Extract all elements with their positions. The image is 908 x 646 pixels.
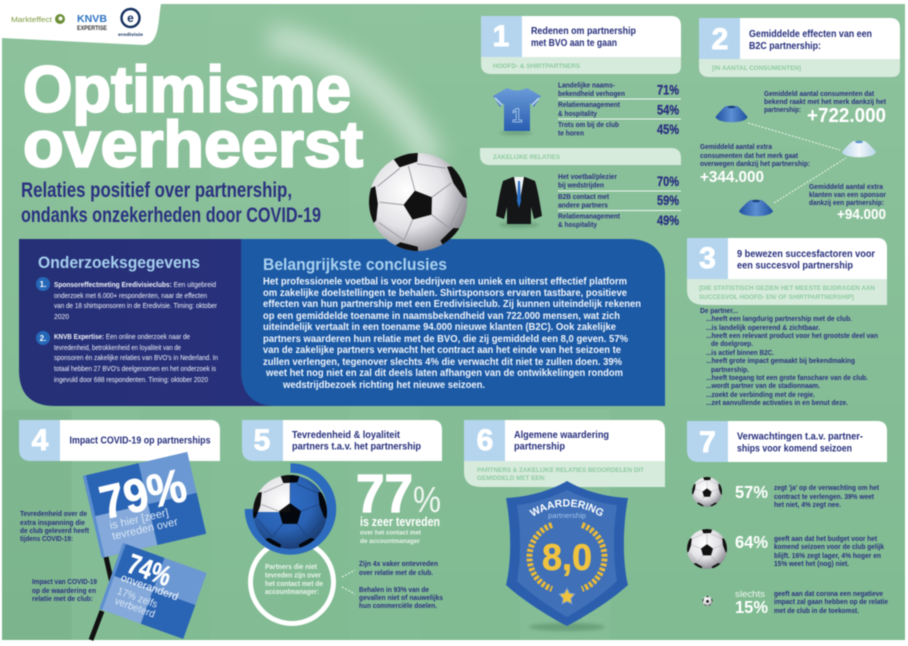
header: section 2: 2 bbox=[712, 23, 728, 56]
text: sponsoreffectmeting: Sponsoreffectmeting Eredivisieclubs: Een uitgebreid bbox=[54, 280, 216, 289]
logo: KNVB Expertise: KNVB bbox=[77, 14, 107, 25]
header: section 3: [DIE STATISTISCH GEZIEN HET MEESTE BIJDRAGEN AAN bbox=[699, 286, 875, 292]
flag: 79% bbox=[83, 452, 206, 558]
stat: 722.000 bbox=[764, 91, 887, 127]
text: tevredenheid label: Tevredenheid over de bbox=[20, 511, 87, 518]
flag: 74% bbox=[99, 543, 207, 639]
list: zakelijke relaties: Het voetbal/plezier bbox=[558, 174, 617, 181]
band: zakelijke relaties: ZAKELIJKE RELATIES bbox=[493, 155, 560, 161]
list: succesfactoren: ...heeft toegang tot een grote fanschare van de club. bbox=[706, 375, 868, 382]
list: succesfactoren: De partner... bbox=[700, 308, 738, 315]
stat: 77%: de accountmanager bbox=[360, 538, 420, 545]
stat: 94.000: Gemiddeld aantal extra bbox=[809, 184, 883, 191]
badge: waardering 8,0: partnership bbox=[548, 513, 586, 520]
header: section 1: Redenen om partnership bbox=[531, 25, 636, 37]
icon: number 1 bbox=[36, 277, 50, 291]
icon: star bbox=[559, 588, 575, 604]
stat: 344.000: overwegen dankzij het partnership: bbox=[700, 161, 810, 168]
stat: 94.000: +94.000 bbox=[837, 206, 886, 223]
header: section 5: Tevredenheid & loyaliteit bbox=[292, 429, 400, 441]
header: section 4 bbox=[19, 420, 220, 461]
text: impact label: relatie met de club: bbox=[32, 596, 93, 603]
stat: 77%: over het contact met bbox=[360, 530, 422, 536]
wreath left bbox=[529, 525, 552, 589]
flag: 74%: 74% bbox=[124, 548, 175, 592]
icon: ball 64% bbox=[685, 528, 729, 571]
stat: 94.000: klanten van een sponsor bbox=[809, 192, 886, 199]
badge: waardering 8,0: 8,0 bbox=[542, 537, 592, 578]
flag: 74%: verbeterd bbox=[113, 595, 157, 621]
icon: suit bbox=[496, 177, 542, 228]
stat: 77% bbox=[356, 464, 441, 545]
stat: 722.000: +722.000 bbox=[807, 105, 886, 127]
header: section 6: PARTNERS & ZAKELIJKE RELATIES BEOORDELEN DIT bbox=[477, 468, 644, 474]
list: zakelijke relaties: B2B contact met bbox=[558, 194, 610, 201]
header: section 1: HOOFD- & SHIRTPARTNERS bbox=[493, 64, 580, 70]
header: section 6: Algemene waardering bbox=[514, 429, 609, 441]
heading: belangrijkste conclusies: Belangrijkste conclusies bbox=[263, 255, 447, 274]
text: conclusies: om zakelijke doelstellingen te behalen. Shirtsponsors ervaren tastbare, positieve bbox=[263, 288, 627, 299]
icon: cone 2 bbox=[842, 141, 876, 157]
header: section 2: [IN AANTAL CONSUMENTEN] bbox=[712, 66, 801, 72]
list: succesfactoren: ...is actief binnen B2C. bbox=[706, 350, 774, 357]
text: gevolgen: hun commerciële doelen. bbox=[359, 603, 437, 610]
wreath right bbox=[582, 525, 605, 589]
logo: Eredivisie bbox=[118, 9, 144, 37]
list: zakelijke relaties: 70% bbox=[657, 174, 679, 189]
ring: niet tevreden bbox=[250, 540, 334, 624]
logo: Markteffect bbox=[11, 14, 65, 24]
list: zakelijke relaties: & hospitality bbox=[558, 222, 597, 229]
text: knvb expertise: tevredenheid, betrokkenheid en loyaliteit van de bbox=[54, 343, 181, 352]
header: section 2 bbox=[699, 18, 900, 77]
stat: 64%: geeft aan dat het budget voor het bbox=[774, 536, 878, 543]
icon: number 2 bbox=[36, 331, 50, 345]
text: conclusies: zullen verlengen, tegenover slechts 4% die verwacht dit niet te zullen doen. 39% bbox=[263, 357, 622, 368]
text: tevredenheid label: extra inspanning die bbox=[20, 520, 85, 527]
header: section 5: partners t.a.v. het partnership bbox=[292, 440, 421, 452]
stat: 64%: blijft. 16% zegt lager, 4% hoger en bbox=[774, 553, 881, 560]
header: section 6: 6 bbox=[477, 424, 493, 457]
text: conclusies bbox=[263, 276, 641, 391]
subtitle: Relaties positief over partnership, bbox=[21, 179, 292, 202]
chart: 77% ring and ball bbox=[250, 468, 331, 552]
list: succesfactoren: partnership. bbox=[711, 367, 749, 374]
header: section 4: 4 bbox=[32, 424, 49, 457]
icon: cone 3 bbox=[739, 200, 773, 216]
logo: Eredivisie: eredivisie bbox=[118, 32, 144, 37]
stat: 57%: zegt 'ja' op de verwachting om het bbox=[774, 485, 880, 492]
panel: onderzoeksgegevens bbox=[19, 239, 300, 406]
header: section 3: SUCCESVOL HOOFD- EN/ OF SHIRTPARTNERSHIP] bbox=[699, 295, 854, 301]
panel: section 7 bbox=[685, 421, 888, 617]
header: section 4: Impact COVID-19 op partnerships bbox=[70, 434, 211, 446]
ring: niet tevreden: het contact met de bbox=[265, 581, 323, 588]
flag pole 2 bbox=[91, 611, 102, 640]
text: conclusies: partners waarderen hun relatie met de BVO, die zij gemiddeld een 8,0 geven. 57% bbox=[263, 334, 628, 345]
text: impact label: op de waardering en bbox=[32, 588, 96, 595]
stat: 15%: 15% bbox=[735, 597, 768, 617]
connector lines bbox=[342, 570, 355, 594]
stat: 77%: % bbox=[413, 479, 441, 520]
list: succesfactoren: ...zoekt de verbinding met de regie. bbox=[706, 392, 815, 399]
flag: 74%: onveranderd bbox=[119, 572, 180, 603]
text: conclusies: op een gemiddelde toename in naamsbekendheid van 722.000 mensen, wat zich bbox=[263, 311, 620, 322]
header: section 5: 5 bbox=[254, 424, 270, 457]
list: succesfactoren bbox=[700, 308, 878, 407]
header: section 3 bbox=[687, 238, 887, 305]
badge: waardering 8,0: WAARDERING bbox=[528, 498, 604, 516]
list: succesfactoren: de doelgroep. bbox=[711, 341, 753, 348]
stat: 15%: slechts bbox=[735, 589, 766, 599]
stat: 57%: 57% bbox=[735, 482, 768, 502]
flag pole 1 bbox=[106, 557, 114, 592]
logo: Eredivisie: e bbox=[127, 11, 134, 25]
text: sponsoreffectmeting bbox=[54, 280, 217, 321]
icon: number 2: 2. bbox=[40, 334, 46, 343]
icon: large football bbox=[354, 139, 483, 267]
panel: section 1 bbox=[480, 16, 681, 229]
header: section 1: met BVO aan te gaan bbox=[531, 37, 617, 49]
list: zakelijke relaties: 49% bbox=[657, 213, 679, 228]
panel: section 6 bbox=[464, 419, 666, 632]
header: section 3: 3 bbox=[699, 242, 716, 275]
icon: ball 15% bbox=[702, 596, 713, 606]
stat: 15% bbox=[735, 589, 888, 617]
stat: 15%: met de club in de toekomst. bbox=[774, 608, 859, 615]
list: shirtpartners: & hospitality bbox=[558, 111, 597, 118]
text: conclusies: effecten van hun partnership met een Eredivisieclub. Zij kunnen uiteindelijk rekenen bbox=[263, 299, 641, 310]
list: zakelijke relaties: Relatiemanagement bbox=[558, 214, 621, 220]
heading: onderzoeksgegevens: Onderzoeksgegevens bbox=[38, 253, 200, 272]
stat: 57% bbox=[735, 482, 880, 509]
stat: 64%: komend seizoen voor de club gelijk bbox=[774, 544, 884, 551]
header: section 1 bbox=[481, 16, 681, 74]
flag: 79%: tevreden over bbox=[111, 516, 179, 543]
stat: 722.000: Gemiddeld aantal consumenten dat bbox=[764, 91, 875, 98]
icon: ball 57% bbox=[691, 476, 723, 508]
header: section 7: ships voor komend seizoen bbox=[737, 442, 852, 454]
logo corner bbox=[0, 0, 161, 45]
text: knvb expertise: KNVB Expertise: Een online onderzoek naar de bbox=[54, 332, 190, 341]
stat: 94.000 bbox=[809, 184, 886, 223]
badge: waardering 8,0 bbox=[506, 480, 628, 632]
panel: section 5 bbox=[242, 420, 443, 624]
list: shirtpartners: te horen bbox=[558, 130, 584, 138]
list: succesfactoren: ...heeft grote impact gemaakt bij bekendmaking bbox=[706, 358, 855, 365]
list: shirtpartners: Landelijke naams- bbox=[558, 82, 616, 90]
text: tevredenheid label bbox=[20, 511, 90, 543]
flag: 79%: is hier [zeer] bbox=[109, 507, 170, 532]
stat: 94.000: dankzij een partnership: bbox=[809, 200, 884, 207]
stat: 57%: contract te verlengen. 39% weet bbox=[774, 494, 875, 501]
stat: 64% bbox=[735, 532, 884, 568]
stat: 344.000 bbox=[700, 144, 810, 186]
icon: cone 1 bbox=[716, 106, 748, 122]
connector lines bbox=[748, 123, 846, 203]
text: sponsoreffectmeting: 2020 bbox=[54, 312, 69, 321]
logo: KNVB Expertise bbox=[77, 14, 107, 32]
text: knvb expertise: totaal hebben 27 BVO's deelgenomen en het onderzoek is bbox=[54, 364, 216, 373]
stat: 64%: 15% weet het (nog) niet. bbox=[774, 561, 849, 568]
text: conclusies: van de zakelijke partners verwacht het contract aan het einde van het seizoen te bbox=[263, 345, 621, 356]
ring: niet tevreden: tevreden zijn over bbox=[265, 572, 321, 580]
header: section 2: Gemiddelde effecten van een bbox=[749, 28, 872, 40]
panel: section 2 bbox=[699, 18, 900, 223]
header: section 5 bbox=[242, 420, 442, 461]
band: zakelijke relaties bbox=[480, 148, 681, 165]
icon: shirt bbox=[493, 88, 541, 135]
list: shirtpartners: Trots om bij de club bbox=[558, 122, 619, 129]
subtitle: ondanks onzekerheden door COVID-19 bbox=[21, 204, 321, 227]
flag: 79%: 79% bbox=[95, 458, 191, 529]
text: conclusies: weet het nog niet en zal dit deels laten afhangen van de ontwikkelingen rondom bbox=[265, 368, 623, 379]
list: succesfactoren: ...is landelijk opererend & zichtbaar. bbox=[706, 325, 820, 332]
list: shirtpartners bbox=[558, 82, 681, 138]
text: gevolgen: Behalen in 93% van de bbox=[359, 587, 429, 594]
flag: 74%: 17% zelfs bbox=[115, 585, 159, 611]
stat: 344.000: Gemiddeld aantal extra bbox=[700, 144, 772, 151]
header: section 6 bbox=[464, 420, 665, 487]
text: sponsoreffectmeting: onderzoek met 6.000+ respondenten, naar de effecten bbox=[54, 291, 207, 300]
stat: 344.000: +344.000 bbox=[700, 169, 764, 186]
list: succesfactoren: ...wordt partner van de stadionnaam. bbox=[706, 383, 820, 390]
text: conclusies: wedstrijdbezoek richting het nieuwe seizoen. bbox=[282, 380, 485, 391]
stat: 57%: het niet, 4% zegt nee. bbox=[774, 502, 841, 509]
subtitle bbox=[21, 179, 321, 227]
stat: 77%: 77 bbox=[356, 464, 413, 524]
list: succesfactoren: ...zet aanvullende activaties in en benut deze. bbox=[706, 400, 848, 407]
logo: Markteffect: Markteffect bbox=[11, 17, 52, 24]
list: zakelijke relaties: 59% bbox=[657, 193, 679, 208]
text: knvb expertise: ingevuld door 688 respondenten. Timing: oktober 2020 bbox=[54, 375, 208, 384]
list: zakelijke relaties: andere partners bbox=[558, 202, 608, 210]
header: section 7 bbox=[687, 421, 887, 462]
stat: 15%: impact zal gaan hebben op de relatie bbox=[774, 599, 888, 606]
text: impact label: Impact van COVID-19 bbox=[32, 579, 97, 586]
text: gevolgen: gevallen niet of nauwelijks bbox=[359, 595, 443, 602]
panel: section 3 bbox=[687, 238, 887, 407]
stat: 64%: 64% bbox=[735, 532, 768, 552]
text: knvb expertise: sponsoren én zakelijke relaties van BVO's in Nederland. In bbox=[54, 353, 218, 362]
text: knvb expertise bbox=[54, 332, 218, 384]
ring: niet tevreden: accountmanager: bbox=[265, 589, 319, 596]
ring: niet tevreden: Partners die niet bbox=[265, 564, 318, 571]
text: tevredenheid label: tijdens COVID-19: bbox=[20, 536, 73, 543]
text: conclusies: uiteindelijk vertaalt in een toename 94.000 nieuwe klanten (B2C). Ook zakelijke bbox=[263, 322, 616, 333]
list: succesfactoren: ...heeft een langdurig partnership met de club. bbox=[706, 316, 852, 323]
stat: 77%: is zeer tevreden bbox=[360, 514, 440, 529]
text: sponsoreffectmeting: van de 18 shirtsponsoren in de Eredivisie. Timing: oktober bbox=[54, 301, 217, 310]
panel: belangrijkste conclusies bbox=[241, 239, 665, 406]
logo: KNVB Expertise: EXPERTISE bbox=[77, 26, 107, 32]
title: overheerst bbox=[23, 108, 363, 180]
text: tevredenheid label: de club geleverd heeft bbox=[20, 528, 90, 535]
header: section 1: 1 bbox=[493, 20, 509, 53]
header: section 3: 9 bewezen succesfactoren voor bbox=[737, 248, 875, 260]
list: shirtpartners: bekendheid verhogen bbox=[558, 91, 625, 98]
title bbox=[23, 52, 363, 180]
text: conclusies: Het professionele voetbal is voor bedrijven een uniek en uiterst effectief platform bbox=[263, 276, 627, 288]
text: gevolgen: Zijn 4x vaker ontevreden bbox=[359, 561, 438, 568]
title: Optimisme bbox=[23, 52, 351, 126]
header: section 2: B2C partnership: bbox=[749, 40, 821, 52]
header: section 7: Verwachtingen t.a.v. partner- bbox=[737, 430, 863, 442]
list: shirtpartners: 71% bbox=[657, 82, 679, 98]
list: shirtpartners: Relatiemanagement bbox=[558, 102, 621, 109]
list: shirtpartners: 54% bbox=[657, 102, 679, 118]
list: zakelijke relaties bbox=[558, 174, 681, 229]
list: shirtpartners: 45% bbox=[657, 122, 679, 137]
header: section 6: partnership bbox=[514, 440, 565, 452]
panel: section 4 bbox=[19, 420, 220, 640]
list: zakelijke relaties: bij wedstrijden bbox=[558, 182, 604, 190]
list: succesfactoren: ...heeft een relevant product voor het grootste deel van bbox=[706, 333, 878, 340]
text: gevolgen: over relatie met de club. bbox=[359, 570, 433, 577]
header: section 3: een succesvol partnership bbox=[737, 260, 853, 272]
stat: 722.000: partnership: bbox=[764, 107, 801, 114]
header: section 6: GEMIDDELD MET EEN: bbox=[477, 476, 546, 482]
text: gevolgen bbox=[359, 561, 443, 610]
stat: 722.000: bekend raakt met het merk dankzij het bbox=[764, 99, 887, 106]
stat: 344.000: consumenten dat het merk gaat bbox=[700, 153, 799, 160]
icon: shirt: 1 bbox=[512, 106, 523, 127]
header: section 7: 7 bbox=[699, 426, 716, 459]
icon: number 1: 1. bbox=[40, 280, 46, 289]
text: impact label bbox=[32, 579, 97, 603]
stat: 15%: geeft aan dat corona een negatieve bbox=[774, 591, 883, 598]
